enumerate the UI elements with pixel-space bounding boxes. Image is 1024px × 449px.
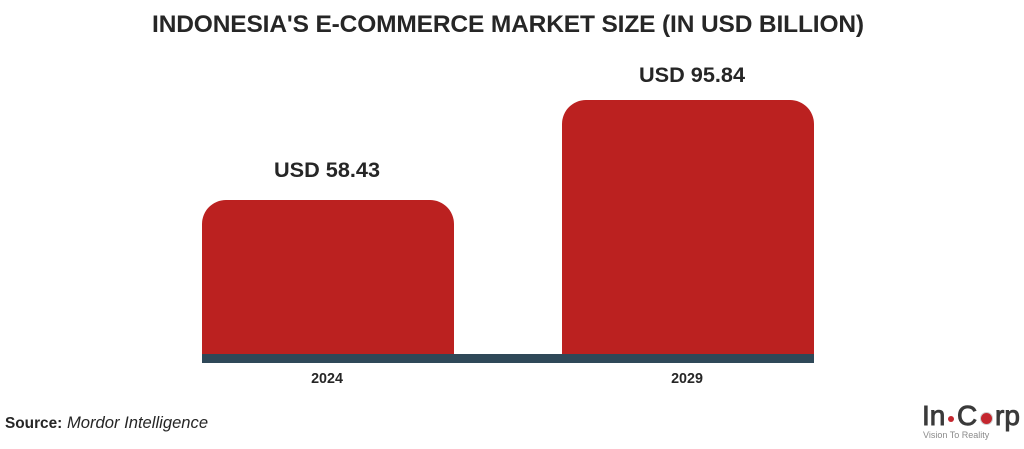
source note: Source: Mordor Intelligence [5, 413, 208, 432]
logo: InCorp [922, 400, 1020, 440]
logo wordmark: In: In [922, 400, 945, 431]
value label: 2024: USD 58.43 [274, 157, 380, 182]
logo wordmark: C: C [957, 400, 977, 431]
bar: 2029 [562, 100, 814, 354]
logo tagline: Vision To Reality [923, 430, 989, 440]
icon: globe [980, 412, 993, 425]
axis label: 2024: 2024 [311, 371, 343, 387]
logo wordmark: rp: rp [995, 400, 1020, 431]
bar: 2024 [202, 200, 454, 354]
value label: 2029: USD 95.84 [639, 62, 745, 87]
logo red dot [948, 416, 954, 422]
axis baseline [202, 354, 814, 363]
axis label: 2029: 2029 [671, 371, 703, 387]
title: INDONESIA'S E-COMMERCE MARKET SIZE (IN USD BILLION) [152, 11, 864, 38]
